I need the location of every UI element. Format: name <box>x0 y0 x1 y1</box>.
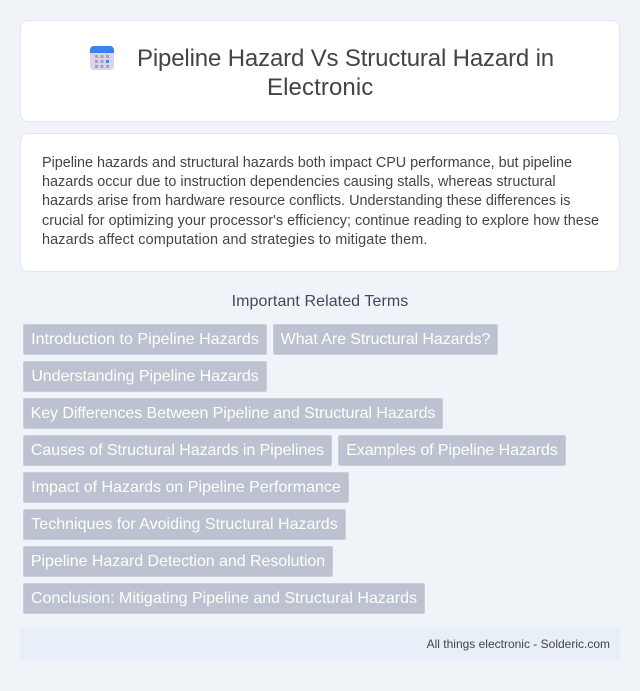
title: Pipeline Hazard Vs Structural Hazard in <box>137 45 554 72</box>
tag <box>273 324 498 355</box>
tag <box>23 324 267 355</box>
title <box>137 45 554 101</box>
tag: What Are Structural Hazards? <box>281 331 490 348</box>
tag <box>23 361 267 392</box>
panel: title card <box>20 20 620 122</box>
footer credit: All things electronic - Solderic.com <box>427 637 610 651</box>
summary paragraph: hazards arise from hardware resource conflicts. Understanding these differences is <box>42 193 570 209</box>
panel: summary card <box>20 133 620 272</box>
tag: Pipeline Hazard Detection and Resolution <box>31 553 325 570</box>
tag <box>23 398 443 429</box>
tag: Introduction to Pipeline Hazards <box>31 331 259 348</box>
tag <box>23 583 425 614</box>
tag: Key Differences Between Pipeline and Structural Hazards <box>31 405 435 422</box>
tag: Causes of Structural Hazards in Pipelines <box>31 442 324 459</box>
tag <box>23 435 332 466</box>
tag <box>23 472 349 503</box>
summary paragraph: Pipeline hazards and structural hazards both impact CPU performance, but pipeline <box>42 155 572 171</box>
tag: Impact of Hazards on Pipeline Performance <box>31 479 341 496</box>
summary paragraph: hazards affect computation and strategies to mitigate them. <box>42 232 428 248</box>
tag <box>338 435 566 466</box>
tag: Conclusion: Mitigating Pipeline and Structural Hazards <box>31 590 417 607</box>
tag list <box>23 324 566 614</box>
tag: Techniques for Avoiding Structural Hazards <box>31 516 338 533</box>
summary paragraph <box>42 155 599 248</box>
tag <box>23 509 346 540</box>
heading: important related terms: Important Related Terms <box>232 293 408 310</box>
summary paragraph: hazards occur due to instruction dependencies causing stalls, whereas structural <box>42 174 556 190</box>
summary paragraph: crucial for optimizing your processor's efficiency; continue reading to explore how these <box>42 213 599 229</box>
tag: Examples of Pipeline Hazards <box>346 442 558 459</box>
title: Electronic <box>267 74 373 101</box>
tag <box>23 546 333 577</box>
icon: calendar grid <box>90 46 114 70</box>
footer bar <box>20 627 620 661</box>
tag: Understanding Pipeline Hazards <box>31 368 259 385</box>
